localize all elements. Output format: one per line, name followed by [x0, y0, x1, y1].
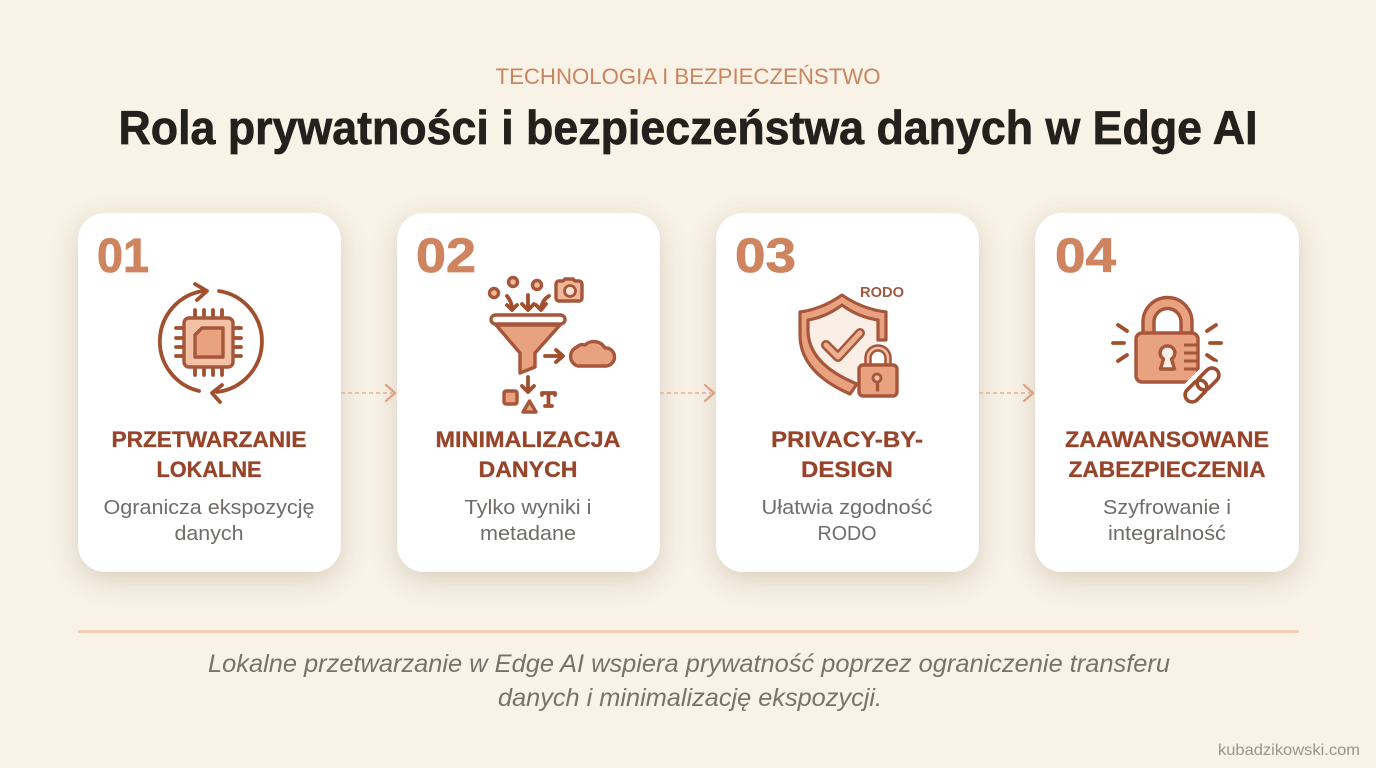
- panel: 03 privacy-by-design: RODO: [818, 522, 876, 545]
- divider line: [78, 630, 1299, 633]
- arrow 3 to 4: [979, 385, 1033, 401]
- title: Rola prywatności i bezpieczeństwa danych w Edge AI: [118, 101, 1258, 154]
- icon: padlock with chain link: [1113, 298, 1225, 407]
- panel: 04 zaawansowane zabezpieczenia: integralność: [1108, 522, 1226, 545]
- panel: 04 zaawansowane zabezpieczenia: ZABEZPIECZENIA: [1068, 457, 1266, 482]
- panel: 01 przetwarzanie lokalne: danych: [174, 522, 244, 545]
- panel: 01 przetwarzanie lokalne: LOKALNE: [156, 457, 262, 482]
- panel: 01 przetwarzanie lokalne: [78, 213, 341, 572]
- panel: 02 minimalizacja danych: [397, 213, 660, 572]
- card description: Tylko wyniki i: [464, 496, 592, 519]
- card description: Ułatwia zgodność: [762, 496, 932, 519]
- arrow 1 to 2: [341, 385, 395, 401]
- number 04: 04: [1055, 230, 1116, 283]
- panel: 03 privacy-by-design: [716, 213, 979, 572]
- arrow 2 to 3: [660, 385, 714, 401]
- summary text: Lokalne przetwarzanie w Edge AI wspiera prywatność poprzez ograniczenie transferu: [208, 650, 1170, 678]
- panel: 03 privacy-by-design: DESIGN: [801, 457, 893, 482]
- icon: data funnel: [490, 278, 615, 412]
- number 03: 03: [735, 230, 796, 283]
- number 01: 01: [97, 230, 149, 283]
- eyebrow heading: TECHNOLOGIA I BEZPIECZEŃSTWO: [496, 64, 880, 89]
- card heading: MINIMALIZACJA: [436, 427, 621, 452]
- card description: Ogranicza ekspozycję: [104, 496, 314, 519]
- panel: 02 minimalizacja danych: metadane: [480, 522, 576, 545]
- icon: chip with cycle arrows: [160, 284, 262, 402]
- card heading: PRIVACY-BY-: [771, 427, 923, 452]
- panel: 04 zaawansowane zabezpieczenia: [1035, 213, 1299, 572]
- card heading: ZAAWANSOWANE: [1065, 427, 1269, 452]
- watermark: kubadzikowski.com: [1218, 742, 1360, 759]
- card heading: PRZETWARZANIE: [112, 427, 306, 452]
- summary text: [208, 650, 1170, 712]
- icon: shield with lock and RODO label: RODO: [860, 285, 904, 301]
- number 02: 02: [416, 230, 476, 283]
- icon: shield with lock and RODO label: [800, 285, 904, 396]
- panel: 02 minimalizacja danych: DANYCH: [478, 457, 578, 482]
- summary text: danych i minimalizację ekspozycji.: [498, 684, 882, 712]
- card description: Szyfrowanie i: [1103, 496, 1231, 519]
